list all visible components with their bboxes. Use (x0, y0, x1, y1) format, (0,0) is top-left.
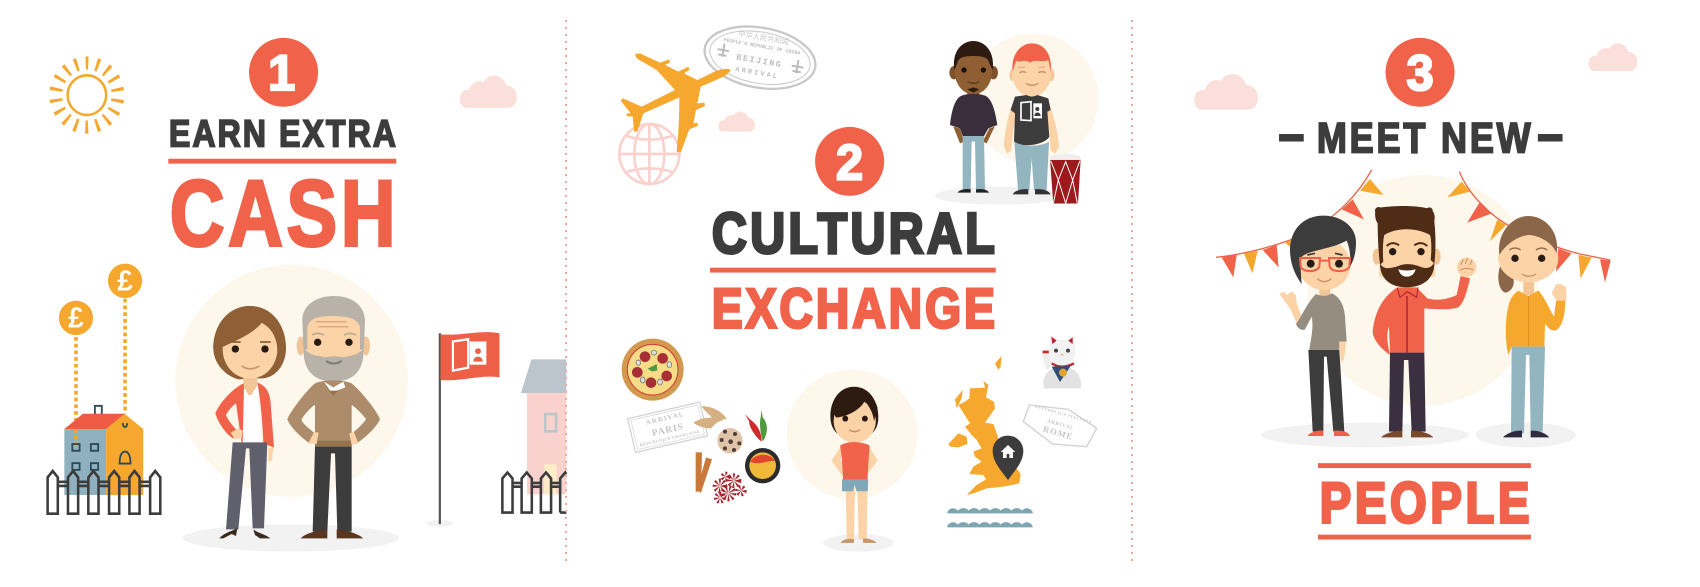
ground shadow (823, 534, 894, 552)
icon: drum (1050, 154, 1081, 204)
figure: older man with beard (287, 296, 380, 538)
icon: airplane (621, 53, 731, 153)
heading: people: PEOPLE (1320, 471, 1533, 535)
background circle: traveller (787, 370, 918, 499)
map and lucky cat cluster (947, 335, 1097, 527)
number badge 1: 1 (268, 46, 295, 101)
icon: map pin home (993, 436, 1023, 480)
figure: woman traveller (830, 387, 878, 543)
stamp: rome (1023, 403, 1097, 447)
stamp: paris (628, 402, 708, 452)
figures: couple (213, 296, 380, 538)
bunting left (1216, 170, 1383, 277)
stamp: paris: ARRIVAL (645, 411, 685, 427)
heading rule top (1318, 463, 1531, 468)
icon: spices (693, 406, 780, 510)
heading: earn extra: EARN EXTRA (169, 112, 398, 155)
number badge 2: 2 (836, 135, 863, 190)
figure: man with red hair (1004, 43, 1059, 194)
icon: pink house (521, 359, 566, 494)
number badge 2 (815, 127, 884, 196)
heading: cash: CASH (170, 160, 399, 266)
stamp: beijing: 中华人民共和国 (737, 29, 790, 47)
icon: fence (48, 471, 160, 514)
icon: fence right (502, 472, 566, 513)
background circle (1307, 175, 1538, 406)
figure: woman waving in yellow shirt (1498, 216, 1567, 437)
panel: earn extra cash (48, 38, 566, 551)
heading rule bottom (1318, 535, 1531, 540)
heading underline (710, 268, 996, 273)
icon: cloud right (1589, 43, 1637, 71)
stamp: rome: ROME (1042, 424, 1075, 442)
heading: exchange: EXCHANGE (712, 277, 998, 340)
icon: house (64, 406, 143, 495)
icon: waves (947, 508, 1033, 527)
figure: man in dark sweater (949, 41, 998, 193)
stamp: paris: RÉPUBLIQUE FRANÇAISE (639, 429, 700, 448)
icon: sun (56, 63, 118, 127)
stamp: beijing (700, 18, 820, 97)
icon: flag on pole (427, 332, 499, 527)
friends scene (1216, 170, 1611, 447)
number badge 1 (249, 38, 318, 107)
number badge 3 (1386, 38, 1455, 107)
icon: cloud (718, 112, 755, 132)
dotted divider: right (1131, 20, 1133, 566)
icon: pound coins with dotted lines (59, 264, 142, 449)
number badge 3: 3 (1407, 46, 1434, 101)
icon: UK map (948, 356, 1021, 495)
panel: cultural exchange (619, 18, 1098, 552)
dotted divider: left (565, 20, 567, 566)
icon: cloud left (1194, 74, 1258, 110)
scenery and titles for panel one (48, 38, 566, 551)
clouds and headings for panel three (1194, 38, 1637, 540)
food and stamp cluster (622, 339, 780, 510)
stamp: beijing: BEIJING (736, 52, 783, 70)
background circle: friends (935, 33, 1098, 205)
stamp: beijing: PEOPLE'S REPUBLIC OF CHINA (723, 37, 801, 57)
ground shadow (182, 525, 399, 551)
titles and traveller for panel two (710, 127, 998, 552)
icon: pizza (622, 339, 684, 401)
stamp: rome: REPUBBLICA ITALIANA (1034, 403, 1093, 425)
icon: globe (619, 124, 679, 184)
ground shadows (1261, 423, 1576, 447)
figure: bearded man with raised fist (1373, 206, 1476, 437)
heading: meet new: MEET NEW (1317, 114, 1533, 162)
figures: two friends and drum (949, 41, 1081, 204)
travel icons (619, 18, 820, 184)
stamp: beijing: ARRIVAL (735, 65, 780, 81)
icon: lucky cat (1042, 335, 1081, 388)
background circle (175, 265, 408, 497)
icon: pound coins with dotted lines: £ (68, 302, 84, 334)
icon: pound coins with dotted lines: £ (117, 265, 133, 297)
figure: woman in red cardigan (213, 306, 286, 538)
heading: cultural: CULTURAL (712, 202, 998, 266)
icon: cloud (460, 76, 517, 108)
bunting right (1447, 172, 1611, 283)
heading underline (168, 159, 396, 164)
stamp: rome: ARRIVAL (1047, 419, 1074, 432)
figure: woman with glasses (1279, 216, 1356, 436)
stamp: paris: PARIS (651, 422, 685, 439)
panel: meet new people (1194, 38, 1637, 540)
